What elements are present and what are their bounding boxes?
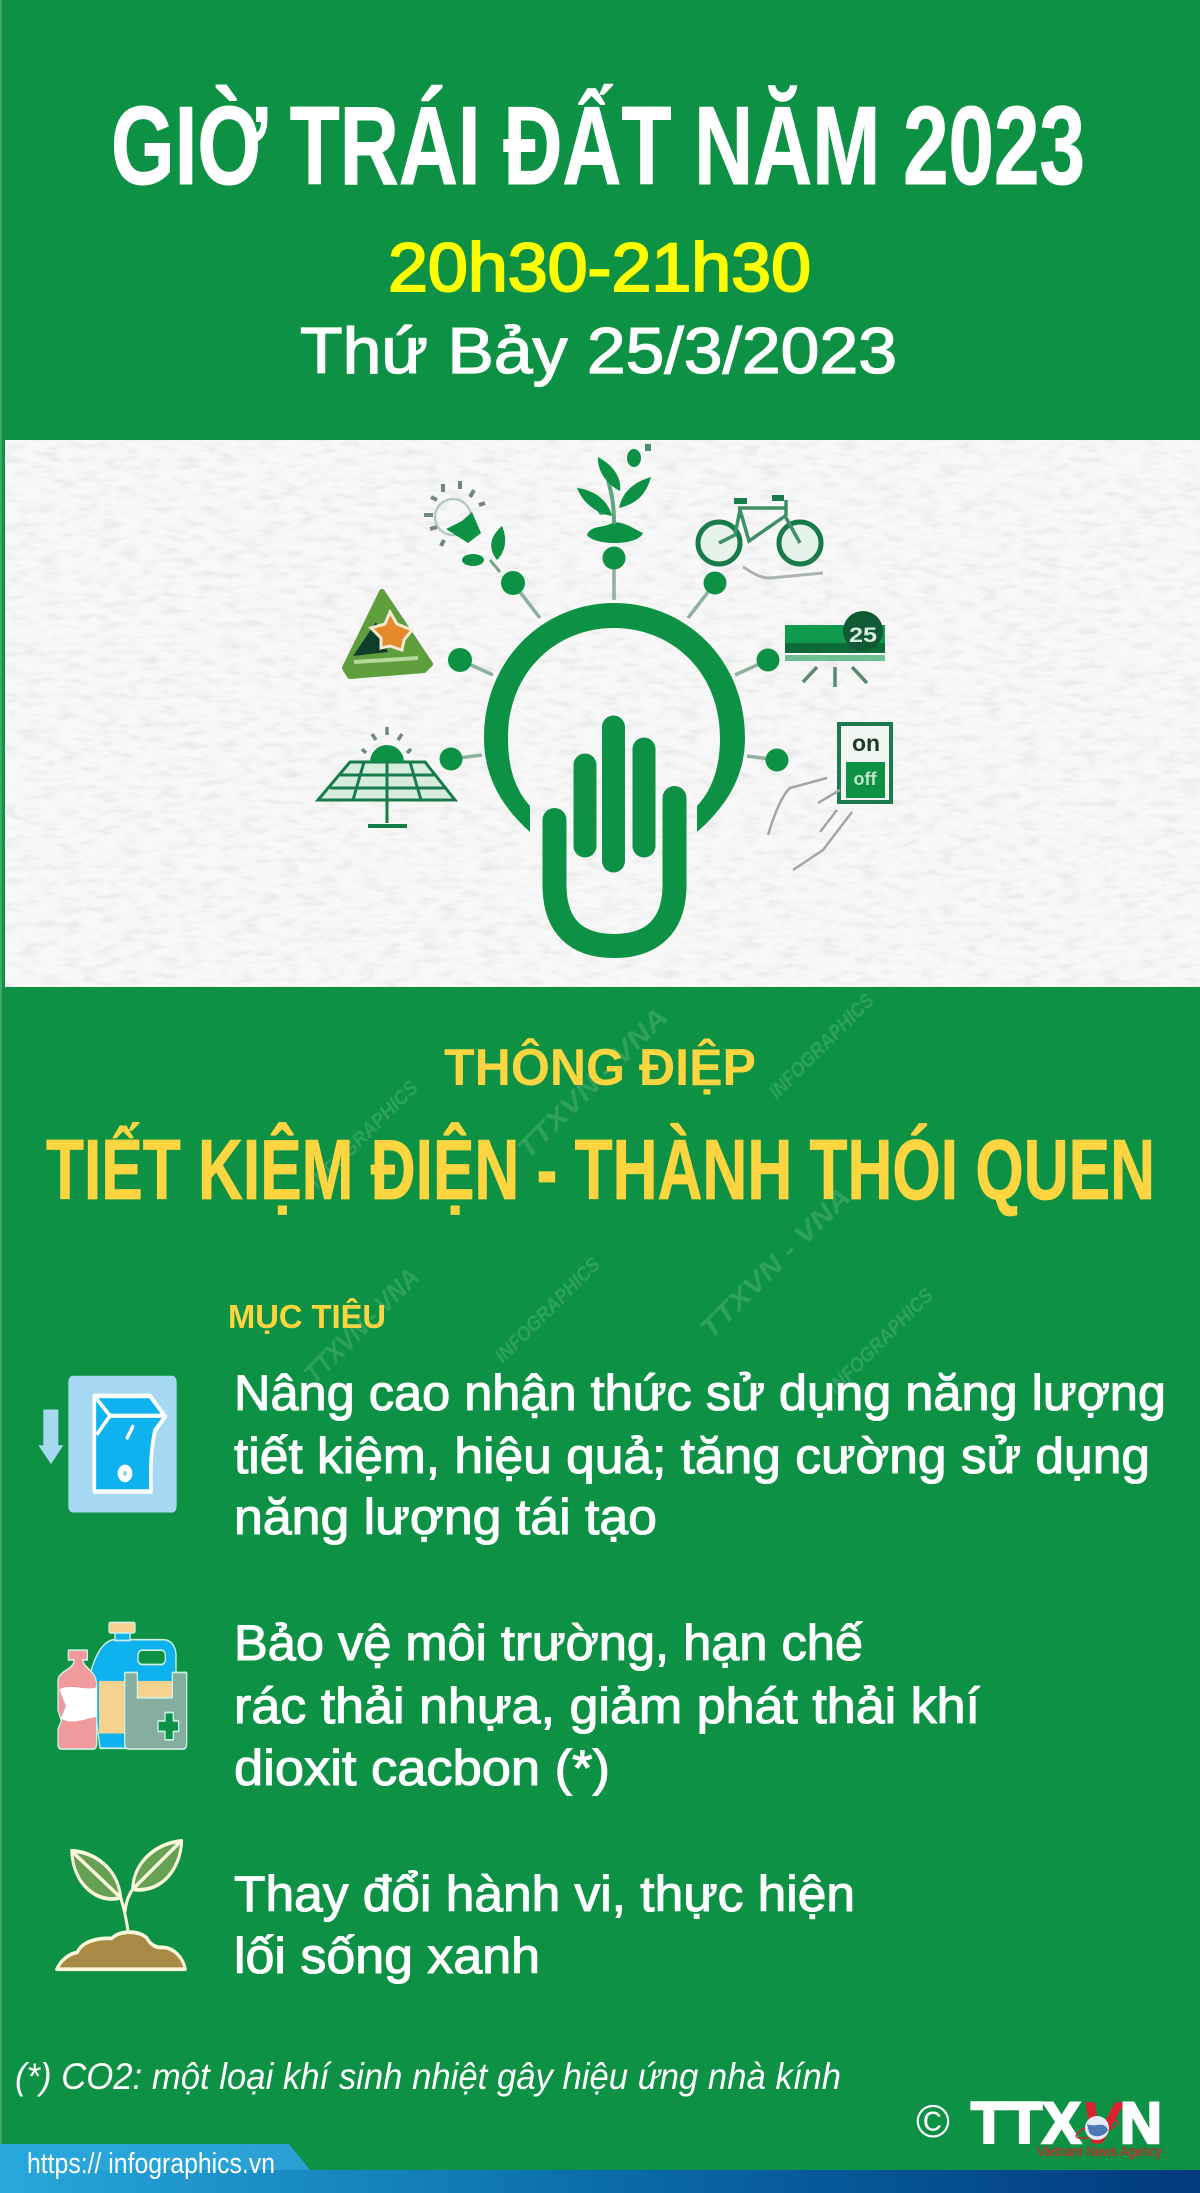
objective 3 <box>57 1841 855 1984</box>
footer bar <box>0 2144 1200 2193</box>
date: Thứ Bảy 25/3/2023 <box>300 314 897 387</box>
wordmark: TTXVN <box>971 2091 1162 2156</box>
source url: https:// infographics.vn <box>27 2148 275 2180</box>
text: objective 3 <box>234 1866 855 1984</box>
panel: illustration on paper background <box>5 440 1200 987</box>
message label: THÔNG ĐIỆP <box>444 1038 756 1097</box>
icon: light switch <box>38 1376 177 1513</box>
text: objective 2: dioxit cacbon (*) <box>234 1740 610 1796</box>
icon: plastic waste <box>58 1622 187 1749</box>
icon: calendar sign 25: 25 <box>849 624 877 647</box>
icon: light bulb and hand <box>484 603 745 946</box>
logo: TTXVN: Vietnam News Agency <box>1037 2143 1162 2159</box>
watermarks: TTXVN - VNA <box>298 1262 425 1389</box>
text: objective 2: rác thải nhựa, giảm phát thải khí <box>234 1678 980 1734</box>
text: objective 3: Thay đổi hành vi, thực hiện <box>234 1866 855 1922</box>
copyright symbol: © <box>916 2095 950 2147</box>
text: objective 1: Nâng cao nhận thức sử dụng năng lượng <box>234 1365 1166 1421</box>
globe <box>1074 2116 1120 2142</box>
icon: on off switch and hand <box>768 724 891 870</box>
icon: seedling <box>57 1841 185 1969</box>
text: objective 3: lối sống xanh <box>234 1928 540 1984</box>
icon: on off switch and hand: on <box>852 730 880 756</box>
icon: calendar sign 25 <box>785 611 885 687</box>
icon: eco bulb <box>424 481 505 572</box>
text: objective 2: Bảo vệ môi trường, hạn chế <box>234 1615 863 1671</box>
message heading <box>46 1038 1155 1218</box>
logo: TTXVN <box>916 2091 1162 2159</box>
header <box>111 83 1085 387</box>
time range: 20h30-21h30 <box>388 229 811 306</box>
icon: on off switch and hand: off <box>854 769 877 789</box>
watermarks: INFOGRAPHICS <box>491 1253 605 1368</box>
watermarks: INFOGRAPHICS <box>824 1284 938 1399</box>
text: objective 1: tiết kiệm, hiệu quả; tăng cường sử dụng <box>234 1428 1150 1484</box>
objectives heading: MỤC TIÊU <box>228 1298 386 1335</box>
watermarks: TTXVN - VNA <box>694 1182 857 1344</box>
objective 2 <box>58 1615 980 1796</box>
footnote: (*) CO2: một loại khí sinh nhiệt gây hiệu ứng nhà kính <box>15 2056 841 2097</box>
text: objective 2 <box>234 1615 980 1796</box>
icon: solar panel <box>318 727 455 826</box>
icon: bicycle <box>698 498 823 578</box>
connector nodes <box>440 546 788 772</box>
watermarks <box>298 989 938 1399</box>
icon: sprouting plant <box>577 444 651 543</box>
watermarks: TTXVN - VNA <box>511 1002 674 1164</box>
text: objective 1 <box>234 1365 1166 1545</box>
text: objective 1: năng lượng tái tạo <box>234 1489 657 1545</box>
objective 1 <box>38 1365 1166 1545</box>
icon: badge <box>345 592 430 676</box>
watermarks: INFOGRAPHICS <box>765 989 879 1104</box>
watermarks: INFOGRAPHICS <box>306 1076 423 1194</box>
